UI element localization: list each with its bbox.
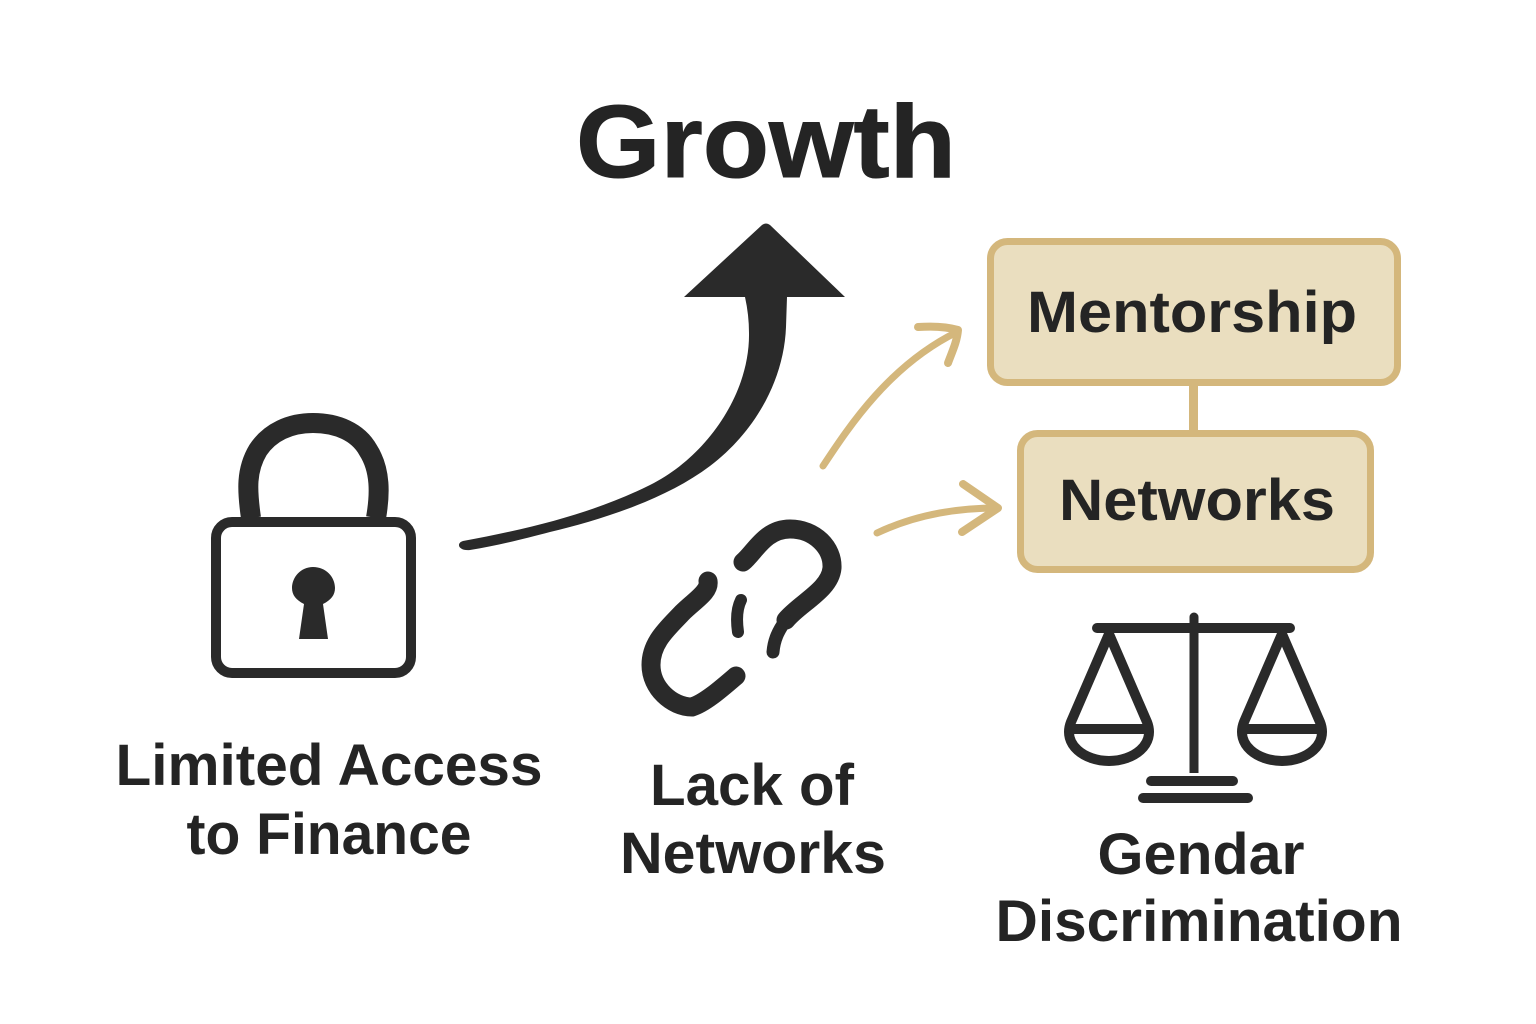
box: networks: Networks [1059, 468, 1335, 533]
connector: mentorship to networks [1189, 384, 1198, 432]
icon: broken chain link [651, 529, 832, 707]
label: limited access to finance: Limited Access [116, 733, 542, 798]
box: mentorship: Mentorship [1027, 280, 1357, 345]
icon: padlock [216, 423, 411, 673]
arrow: to mentorship [823, 327, 958, 466]
box: mentorship [990, 242, 1398, 382]
label: gendar discrimination [996, 822, 1402, 954]
label: limited access to finance: to Finance [186, 802, 472, 867]
arrow: to networks [877, 484, 998, 533]
label: lack of networks: Lack of [650, 753, 855, 818]
title: Growth [576, 84, 956, 199]
label: gendar discrimination: Discrimination [996, 889, 1402, 954]
arrow: growth curve [459, 224, 845, 550]
box: networks [1020, 434, 1370, 570]
label: limited access to finance [116, 733, 542, 867]
label: lack of networks: Networks [620, 821, 886, 886]
label: lack of networks [620, 753, 886, 886]
label: gendar discrimination: Gendar [1098, 822, 1304, 887]
icon: scales of justice [1069, 617, 1322, 798]
